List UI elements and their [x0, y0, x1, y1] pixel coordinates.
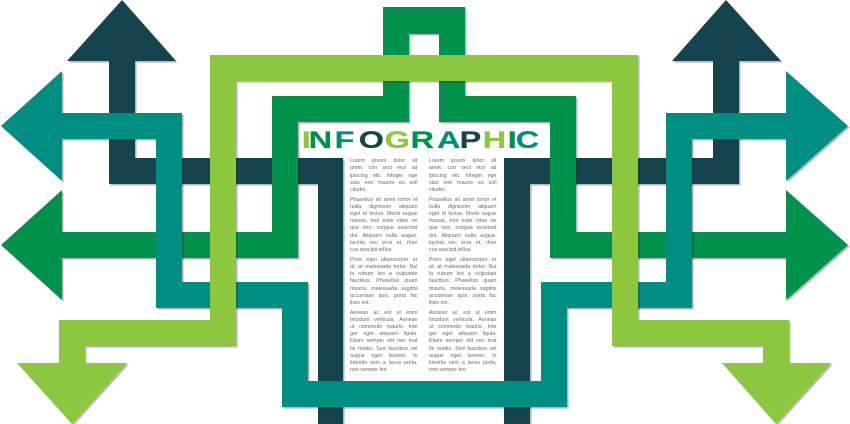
text block: left column	[350, 158, 418, 373]
title: O	[359, 127, 384, 154]
text block: left column: Proin eget ullamcorper er	[350, 257, 418, 263]
text block: right column: accumsan quis, porta fac	[429, 293, 496, 299]
title: F	[335, 127, 354, 154]
text block: left column: tis mattis. Sed faucibus vel	[350, 346, 418, 352]
text block: left column: eget id lectus. Morbi augue	[350, 211, 418, 217]
text block: right column: Aenean ac est ut enim	[429, 310, 496, 316]
text block: right column: ut commodo mauris. Inte	[429, 324, 496, 330]
text block: left column: que non, congue euismod	[350, 225, 418, 231]
text block: left column: ilisis est.	[350, 300, 370, 306]
text block: right column: massa, mol estie vitae ne	[429, 218, 496, 224]
text block: right column: at, at malesuada tortor. Nul	[429, 264, 496, 270]
text block: right column: citudin.	[429, 187, 446, 193]
text block: right column: eget id lectus. Morbi augue	[429, 211, 496, 217]
text block: left column: Etiam semper elit nec mat	[350, 338, 418, 344]
text block: right column: Proin eget ullamcorper er	[429, 257, 496, 263]
text block: right column: Etiam semper elit nec mat	[429, 338, 496, 344]
text block: right column: Phasellus sit amet tortor et	[429, 197, 496, 203]
text block: right column: ger eget aliquam ligula.	[429, 331, 496, 337]
text block: left column: lobortis sem a lacus porta,	[350, 360, 418, 366]
title: A	[437, 127, 460, 154]
text block: left column: Lorem ipsum dolor sit	[350, 158, 418, 164]
text block: left column: massa, mol estie vitae ne	[350, 218, 418, 224]
arrow: navy up-left ribbon	[67, 0, 343, 424]
text block: left column: cus suscipit tellus.	[350, 247, 393, 253]
title: I	[508, 127, 517, 154]
text block: left column: augue eget laoreet. In	[350, 353, 418, 359]
text block: left column: tincidunt vehicula. Aenean	[350, 317, 418, 323]
arrow: teal left and right ribbon	[1, 71, 848, 407]
arrow: navy up-right ribbon	[504, 0, 781, 424]
text block: left column: Aenean ac est ut enim	[350, 310, 418, 316]
title: G	[385, 127, 410, 154]
title: H	[483, 127, 506, 154]
text block: left column: non semper leo.	[350, 367, 388, 373]
text block: left column: ipiscing elit. Integer ege	[350, 173, 418, 179]
text block: left column: faucibus. Phasellus quam	[350, 278, 418, 284]
text block: left column: ut commodo mauris. Inte	[350, 324, 418, 330]
text block: left column: at, at malesuada tortor. Nul	[350, 264, 418, 270]
text block: right column: mauris, malesuada sagittis	[429, 286, 496, 292]
text block: left column: citudin.	[350, 187, 367, 193]
text block: right column: ilisis est.	[429, 300, 449, 306]
text block: right column: tincidunt vehicula. Aenean	[429, 317, 496, 323]
text block: right column: lacinia nec eros et, rhon	[429, 240, 496, 246]
text block: right column: faucibus. Phasellus quam	[429, 278, 496, 284]
text block: left column: nulla dignissim aliquam	[350, 204, 418, 210]
title: C	[516, 127, 539, 154]
arrow: green left and right ribbon	[1, 7, 848, 300]
text block: right column: augue eget laoreet. In	[429, 353, 496, 359]
text block: left column: mauris, malesuada sagittis	[350, 286, 418, 292]
text block: right column: stas non mauris eu soll	[429, 180, 496, 186]
text block: left column: accumsan quis, porta fac	[350, 293, 418, 299]
text block: right column: dui. Aliquam nulla augue,	[429, 233, 496, 239]
title: I	[302, 127, 311, 154]
text block: right column: amet, con sect etur ad	[429, 165, 496, 171]
text block: right column: la rutrum leo a vulputate	[429, 271, 496, 277]
title: N	[309, 127, 332, 154]
text block: left column: la rutrum leo a vulputate	[350, 271, 418, 277]
text block: left column: Phasellus sit amet tortor et	[350, 197, 418, 203]
text block: right column: Lorem ipsum dolor sit	[429, 158, 496, 164]
text block: left column: stas non mauris eu soll	[350, 180, 418, 186]
text block: right column: ipiscing elit. Integer ege	[429, 173, 496, 179]
text block: right column: nulla dignissim aliquam	[429, 204, 496, 210]
text block: right column: lobortis sem a lacus porta,	[429, 360, 496, 366]
text block: left column: dui. Aliquam nulla augue,	[350, 233, 418, 239]
text block: right column: cus suscipit tellus.	[429, 247, 472, 253]
text block: right column	[429, 158, 496, 373]
title: P	[460, 127, 481, 154]
text block: left column: ger eget aliquam ligula.	[350, 331, 418, 337]
text block: left column: amet, con sect etur ad	[350, 165, 418, 171]
text block: right column: non semper leo.	[429, 367, 467, 373]
text block: right column: tis mattis. Sed faucibus vel	[429, 346, 496, 352]
text block: right column: que non, congue euismod	[429, 225, 496, 231]
text block: left column: lacinia nec eros et, rhon	[350, 240, 418, 246]
title: R	[411, 127, 434, 154]
